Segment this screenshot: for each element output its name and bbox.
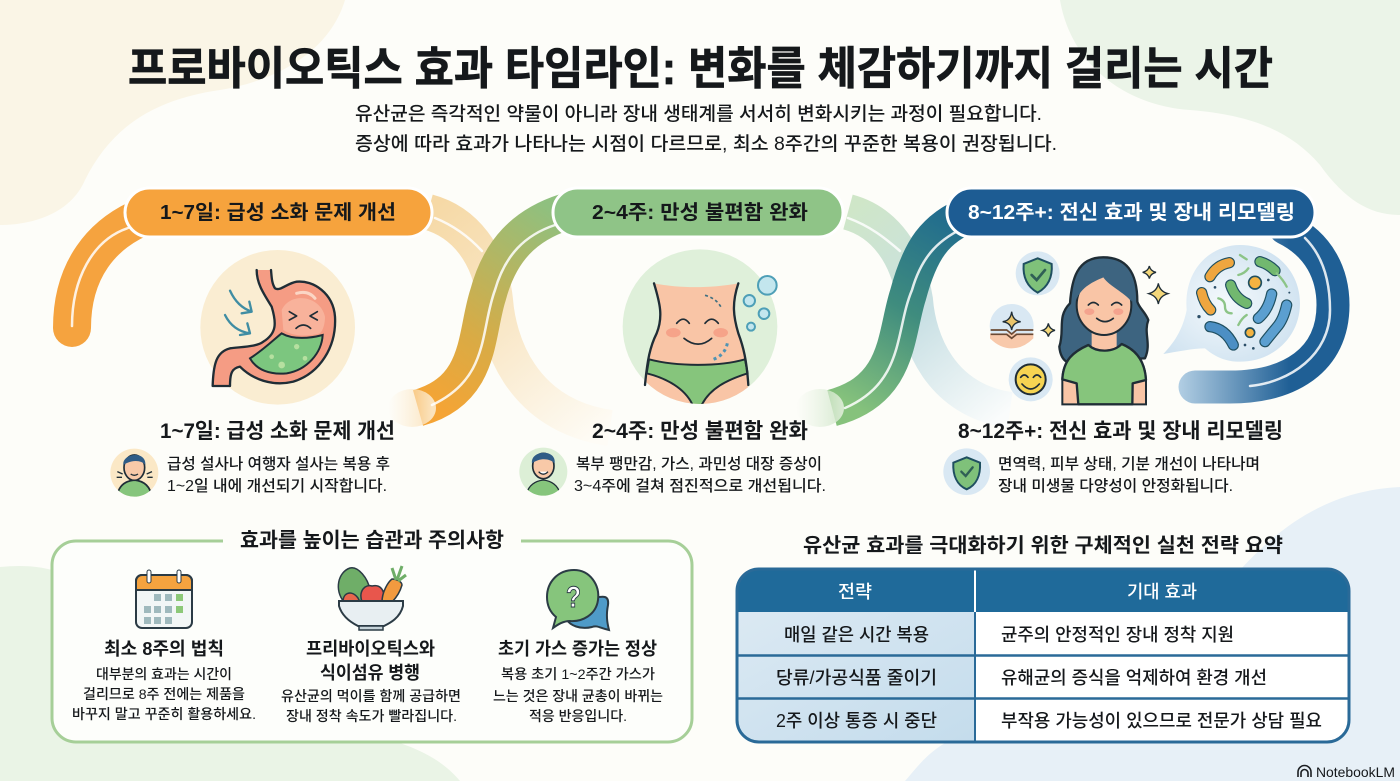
timeline ribbons (72, 212, 1333, 428)
pill: 8~12 weeks: 8~12주+: 전신 효과 및 장내 리모델링 (968, 201, 1295, 224)
item: 8 week rule: 바꾸지 말고 꾸준히 활용하세요. (72, 706, 256, 722)
pill: 1~7 days (125, 188, 432, 237)
pill: 1~7 days: 1~7일: 급성 소화 문제 개선 (160, 201, 396, 224)
ribbon: faded orange (428, 212, 610, 428)
table header: 전략 (838, 582, 872, 602)
item: initial gas is normal: 느는 것은 장내 균총이 바뀌는 (493, 688, 663, 704)
item: 8 week rule: 최소 8주의 법칙 (104, 639, 224, 659)
ribbon: orange to green (418, 212, 565, 408)
item: 8 week rule (72, 639, 256, 722)
table rows: 균주의 안정적인 장내 정착 지원 (1001, 625, 1234, 645)
item: prebiotics and fiber (281, 639, 461, 724)
text: stage 1 description (167, 455, 390, 495)
badge: shield (1016, 251, 1060, 295)
pill: 2~4 weeks: 2~4주: 만성 불편함 완화 (592, 201, 808, 224)
item: initial gas is normal: 복용 초기 1~2주간 가스가 (501, 666, 655, 682)
table: strategies and expected effects (737, 569, 1349, 742)
woman (1059, 257, 1148, 404)
subtitle: 유산균은 즉각적인 약물이 아니라 장내 생태계를 서서히 변화시키는 과정이 필요합니다. (355, 103, 1042, 125)
table rows: 유해균의 증식을 억제하여 환경 개선 (1001, 668, 1267, 688)
ribbon: faded green (848, 212, 1010, 410)
heading: strategy summary: 유산균 효과를 극대화하기 위한 구체적인 실천 전략 요약 (803, 534, 1283, 557)
badge: skin (990, 304, 1034, 348)
speech bubble: bacteria (1163, 245, 1300, 362)
icon: question speech bubbles (547, 570, 609, 630)
badge: smile (1009, 357, 1053, 401)
ribbon cap: orange (388, 389, 436, 427)
ribbon highlights (72, 218, 1330, 408)
logo: NotebookLM: NotebookLM (1316, 764, 1395, 780)
item: initial gas is normal (493, 639, 663, 724)
table rows: 당류/가공식품 줄이기 (776, 668, 937, 688)
panel heading: 효과를 높이는 습관과 주의사항 (240, 529, 504, 552)
text: stage 2 description (574, 455, 826, 495)
icon: question speech bubbles: ? (566, 581, 581, 614)
heading: stage 2: 2~4주: 만성 불편함 완화 (592, 420, 808, 443)
table header: 기대 효과 (1127, 582, 1197, 602)
heading: stage 1: 1~7일: 급성 소화 문제 개선 (160, 420, 395, 443)
table rows: 매일 같은 시간 복용 (784, 625, 929, 645)
ribbon cap: green (796, 389, 844, 427)
text: stage 3 description: 면역력, 피부 상태, 기분 개선이 나타나며 (998, 455, 1260, 473)
item: prebiotics and fiber: 식이섬유 병행 (320, 663, 420, 683)
subtitle: 증상에 따라 효과가 나타나는 시점이 다르므로, 최소 8주간의 꾸준한 복용이 권장됩니다. (355, 133, 1057, 155)
table rows: 부작용 가능성이 있으므로 전문가 상담 필요 (1001, 711, 1322, 731)
item: initial gas is normal: 적응 반응입니다. (529, 708, 627, 724)
item: prebiotics and fiber: 유산균의 먹이를 함께 공급하면 (281, 688, 461, 704)
item: initial gas is normal: 초기 가스 증가는 정상 (498, 639, 657, 659)
title: 프로바이오틱스 효과 타임라인: 변화를 체감하기까지 걸리는 시간 (128, 43, 1273, 94)
item: 8 week rule: 대부분의 효과는 시간이 (96, 666, 232, 682)
table rows: 2주 이상 통증 시 중단 (776, 711, 937, 731)
ribbon: blue end (1195, 228, 1333, 387)
text: stage 3 description (998, 455, 1260, 495)
text: stage 1 description: 1~2일 내에 개선되기 시작합니다. (167, 477, 387, 495)
ribbon: orange start (72, 214, 150, 328)
item: 8 week rule: 걸리므로 8주 전에는 제품을 (83, 686, 245, 702)
subtitle (355, 103, 1057, 155)
sparkles (1042, 266, 1168, 337)
item: prebiotics and fiber: 장내 정착 속도가 빨라집니다. (286, 708, 457, 724)
panel: habits and cautions (52, 529, 692, 742)
pill: 2~4 weeks (553, 188, 843, 237)
table header (838, 582, 1197, 602)
text: stage 1 description: 급성 설사나 여행자 설사는 복용 후 (167, 455, 390, 473)
icon: upset stomach (200, 250, 355, 405)
table rows (776, 625, 1322, 731)
icon: calendar (136, 570, 192, 628)
item: prebiotics and fiber: 프리바이오틱스와 (306, 639, 435, 659)
icon: happy belly (622, 250, 778, 404)
ribbon: green to blue (832, 214, 970, 408)
icon: healthy woman with gut bacteria (990, 245, 1300, 404)
avatar: stage 3 shield (943, 448, 990, 495)
text: stage 2 description: 복부 팽만감, 가스, 과민성 대장 증상이 (576, 455, 822, 473)
avatar: stage 1 (110, 449, 158, 498)
icon: salad bowl (338, 566, 406, 630)
heading: stage 3: 8~12주+: 전신 효과 및 장내 리모델링 (958, 420, 1283, 443)
text: stage 3 description: 장내 미생물 다양성이 안정화됩니다. (998, 477, 1233, 495)
text: stage 2 description: 3~4주에 걸쳐 점진적으로 개선됩니다. (574, 477, 826, 495)
pill: 8~12 weeks (947, 188, 1315, 237)
avatar: stage 2 (519, 448, 567, 498)
